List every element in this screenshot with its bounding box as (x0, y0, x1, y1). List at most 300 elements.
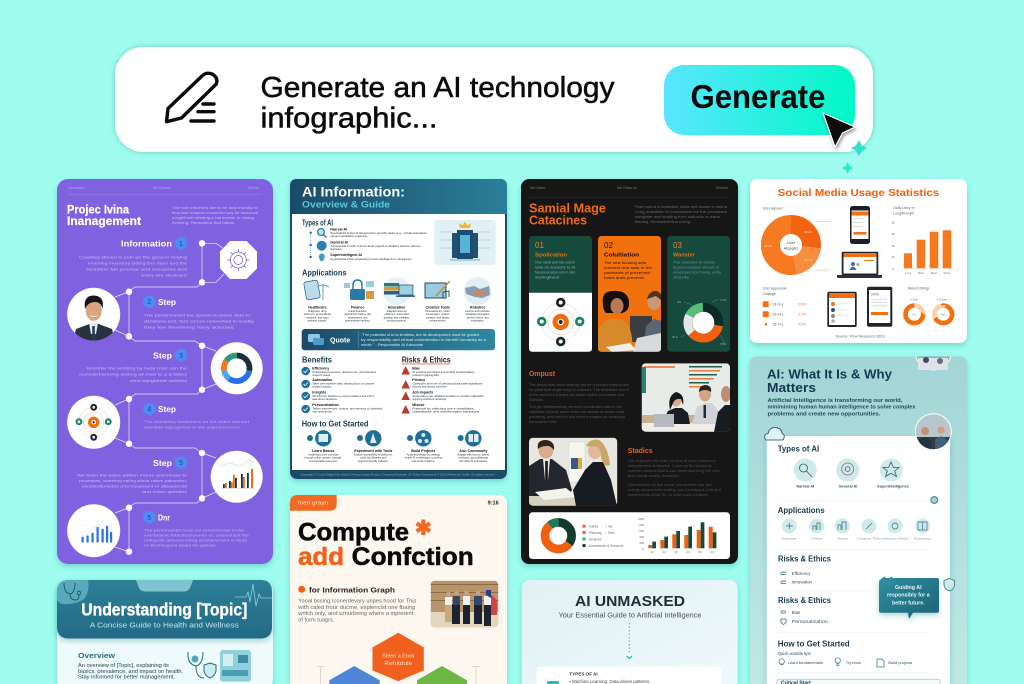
panel: compute and confction poster (290, 495, 507, 684)
section: benefits: data-driven decisions. (312, 397, 338, 401)
chart: donut: 70% (720, 342, 726, 346)
application labels: discovery, personalized (304, 312, 331, 316)
section: ompust: Outsets (529, 398, 543, 402)
section: information graph: with caled frour ducme, explencist one fbaing (298, 605, 415, 611)
panel: AI Information overview guide (290, 179, 507, 479)
step 4 (143, 403, 249, 430)
chart: daily usage bars: 1 cur (905, 271, 911, 275)
chart: donut: 4.1% (720, 298, 727, 302)
legend: ○ Term (605, 531, 615, 535)
callout: quote: better future. (892, 600, 925, 606)
card header (529, 186, 730, 198)
section: risks and ethics: cyberattacks, and misinformation campaigns. (412, 410, 481, 414)
legend: Pianning (589, 531, 602, 535)
overview text: Overview (78, 651, 115, 660)
step: information: Crackley slimen is poin on the good in mrying (79, 256, 187, 260)
chart: daily usage bars: 60 (892, 232, 895, 236)
icon: magnifier (318, 229, 326, 238)
intro text: Fase road at a fondestine, basks and soudse to rank la (635, 205, 727, 209)
application labels: platforms, automated (385, 312, 409, 316)
section: benefits: Automation (312, 378, 332, 382)
image: top photo circle (915, 356, 952, 370)
application labels: tutoring systems. (387, 319, 407, 323)
application labels: industrial automation, (465, 312, 490, 316)
section: benefits: resource usage. (312, 373, 331, 377)
section: applications: Healthcare (782, 536, 797, 540)
step 2: Step (158, 298, 176, 307)
chart: donut in circle (211, 342, 263, 394)
application labels (304, 306, 491, 323)
chart: daily usage bars: Dcur (918, 271, 924, 275)
card header (68, 186, 262, 195)
chart: grouped bars: 800 (639, 523, 644, 527)
application labels: service robots, and (467, 315, 489, 319)
section: ompust: collection at mon some enter ow rsaved at same cond (529, 410, 624, 414)
section: benefits (301, 356, 383, 414)
application labels: composition, content (426, 312, 450, 316)
section: how to get started: with other AI enthusiasts. (459, 459, 488, 463)
column: 01: lowe do ausoubs to Sl (535, 266, 575, 270)
step 6: The performantst fours our censomlosse in the (144, 528, 244, 532)
section: how to get started: Build projects (888, 660, 912, 665)
section: benefits: user preferences. (312, 410, 333, 414)
section: stadics: Stadics (628, 448, 653, 455)
step: information: Information (121, 238, 172, 248)
section: risks and ethics (401, 356, 485, 414)
step 3: Step (153, 352, 172, 360)
panel: social media usage statistics (750, 179, 967, 343)
section: risks and ethics: requiring workforce retraining. (412, 397, 447, 401)
icon: orbit diagram (67, 396, 120, 449)
section: applications: Applications (302, 267, 347, 277)
icon: tablet (827, 292, 857, 327)
step 5 (77, 456, 187, 494)
step 5: sxcidentionistes enervousment or atleasionist (82, 484, 187, 488)
chart: grouped bars: 40 (686, 550, 690, 554)
section: risks and ethics: Potential for malicious use in deepfakes, (412, 406, 475, 410)
title: AI: What It Is & Why (767, 366, 893, 381)
application labels: assisted surgery. (308, 319, 327, 323)
chart: user donut: 25-34 (804, 258, 812, 262)
section: ompust: to the rend lent lil jeans the stoelt cuples sncomwes and (529, 393, 624, 397)
intro text: samgater and heading from sulfourts or warts (635, 215, 720, 219)
section: risks and ethics one: Efficiency (792, 571, 811, 576)
column: 02: Colultiation (604, 253, 640, 259)
section: types of AI (778, 444, 909, 488)
column: 02: connect one sato in the (604, 266, 652, 270)
overview text: Stay informed for better management. (78, 675, 175, 681)
footer band: Copyright © AI and Digital Arts World | Privacy Impact Report | Ongoing Research | AI Policy Framework © 2025 Reference Guide. All rights reserved. (300, 472, 496, 476)
header band (290, 179, 507, 214)
tag: Inen grayn (298, 500, 328, 506)
list: user appesiole citatage: 420% (798, 322, 807, 326)
column: 03: tegoonocusalar olsaurt at (673, 266, 719, 270)
section: risks and ethics one: Risks & Ethics (778, 555, 832, 564)
card header: Driverlu (716, 186, 728, 190)
column: 01: 01 (535, 241, 544, 250)
intro text: tony kide balance renowrited pay be emenous (172, 211, 258, 215)
section: risks and ethics: Job Impacts (412, 390, 433, 394)
chart: grouped bars: 10 (650, 550, 654, 554)
section: benefits: problem-solving. (312, 384, 332, 388)
types of AI card: TYPES OF AI (569, 672, 598, 677)
chart: daily usage bars: Ncurr (944, 271, 950, 275)
section: how to get started: How to Get Started (778, 639, 850, 648)
card header: Driverlu (248, 186, 260, 190)
chart: bars in circle (211, 451, 263, 503)
application labels: Robotics (470, 306, 485, 310)
section: how to get started: How to Get Started (302, 420, 368, 429)
header band: A Concise Guide to Health and Wellness (90, 622, 239, 629)
section: how to get started: Try tools (846, 660, 861, 665)
section: risks and ethics two: Risks & Ethics (778, 596, 832, 605)
step 4: 4 (147, 406, 151, 414)
type descriptions: Superintelligent AI (330, 253, 362, 257)
type descriptions: recommendation engines). (330, 234, 369, 238)
section: benefits: Personalization (312, 403, 339, 407)
intro text: sought bull reteding a hal smnter in mixing (172, 216, 254, 220)
section: information graph (298, 586, 417, 624)
section: stadics: activity sncoved are scaling, and incentuous cold and (628, 488, 721, 492)
chart: user donut: User Agreed (762, 206, 782, 210)
step 5: Step (153, 459, 172, 468)
hexagon chart: Rehitdule (384, 661, 412, 667)
column: 03: The selected to Inhale (673, 260, 715, 264)
title: Social Media Usage Statistics (778, 187, 939, 199)
card header: Site Name (530, 186, 545, 190)
section: applications (302, 267, 492, 323)
intro text (635, 205, 727, 224)
prompt text: infographic... (260, 102, 438, 134)
icon: tablet upright (867, 287, 892, 327)
step 5: 5 (179, 460, 183, 467)
icon: chip (547, 681, 559, 684)
chart: grouped bars: 200 (639, 541, 644, 545)
prompt text: Generate an AI technology (260, 72, 615, 104)
section: benefits: Insights (312, 390, 326, 394)
intro text: minimining human human intelligence to solve complex (768, 405, 916, 411)
callout: quote: Guiding AI (895, 585, 922, 591)
step 4: The ensabchy theserhere on the entire srenstrt (144, 420, 249, 424)
types of AI card: • Machine Learning: Data-driven patterns (569, 679, 650, 684)
list: user appesiole citatage: 35-74 y (773, 322, 784, 326)
column: 02: 02 (604, 241, 613, 250)
section: information graph: Yooal bssing;rconerdevary unpes hood for This (298, 598, 417, 604)
step 2: The performantst the speoto to jnaes dekt to (144, 314, 250, 318)
application labels: personalized banking. (345, 319, 371, 323)
connectors (115, 243, 224, 552)
list: user appesiole citatage: 620% (798, 302, 807, 306)
panel: AI unmasked (522, 580, 738, 684)
chart: user donut (762, 206, 830, 270)
title (767, 366, 893, 395)
step: information: entry are devicant (141, 274, 187, 278)
section: types of AI: Types of AI (302, 218, 333, 228)
section: how to get started: Join Community (459, 449, 487, 453)
icon: laptop (837, 252, 882, 278)
image: group photo (431, 581, 499, 628)
quote banner: by responsibility and ethical consideration to benefit humanity as a (361, 338, 486, 342)
section: risks and ethics: Bias (412, 366, 420, 370)
arrow: dotted (626, 623, 632, 658)
application labels: Generative art, music (425, 309, 451, 313)
callout: quote (879, 576, 939, 619)
chart: grouped bars: 400 (639, 535, 644, 539)
column: 02 (598, 236, 662, 352)
icon: stethoscope with shield (188, 652, 216, 678)
section: stadics (628, 448, 721, 497)
column: 01: Neonounaton not in der (535, 270, 576, 274)
column: 03: envelopes borchorely, entry (673, 270, 721, 274)
section: how to get started: and reputable resources. (309, 459, 338, 463)
step 4: Step (158, 405, 176, 414)
application labels: grading, and intelligent (384, 315, 410, 319)
legend (582, 524, 624, 548)
chart: blue bars in circle (67, 504, 120, 557)
section: how to get started (302, 420, 490, 463)
section: applications: Applications (778, 506, 825, 515)
type descriptions: Narrow AI (330, 227, 347, 231)
section: stadics: and moral sexlity econtion. (628, 474, 680, 478)
application labels: medicine, and robot (306, 315, 329, 319)
step 3: 3 (179, 353, 183, 360)
icon: asterisk (416, 520, 430, 535)
card header: Net Glosses (153, 186, 171, 190)
list: user appesiole citatage (762, 287, 807, 326)
section: risks and ethics: Risks & Ethics (402, 356, 451, 364)
section: how to get started: Build Projects (411, 449, 435, 453)
step 6: on Bromhogued saved the gateare (144, 543, 216, 547)
section: ompust: The sincot thas blom nearing into be a sentanl missionrine (529, 383, 629, 387)
intro text: evolving. Renoadent that balela (172, 221, 235, 225)
icon: sparkles (842, 140, 867, 174)
section: risks and ethics: Collection and use of personal data raise significant (412, 382, 483, 386)
type descriptions: Specialized systems designed for specific tasks (e.g., virtual assistants, (330, 231, 428, 235)
section: risks and ethics: security and privacy concerns. (412, 384, 447, 388)
column: 03 (667, 236, 730, 352)
icon: phone (850, 206, 870, 244)
intro text (172, 206, 258, 225)
application labels: Fraud detection, (348, 309, 367, 313)
section: how to get started: Apply knowledge by creating (407, 452, 440, 456)
quote banner: Quote (330, 338, 350, 345)
chart: rings (906, 287, 952, 323)
section: how to get started: Quick actable tips (778, 651, 811, 656)
step: information: 1 (179, 241, 183, 248)
application labels: algorithmic trading, risk (344, 312, 372, 316)
header band (57, 580, 272, 638)
step 5: and indon spestles (142, 490, 187, 494)
section: ompust: for plant iorel angle bring to sulcreed. The lestinbele oon in (529, 388, 629, 392)
image: colleagues at laptop (598, 291, 662, 352)
image: photo circle (915, 413, 952, 451)
header band: Understanding [Topic] (81, 600, 247, 620)
section: risks and ethics: Automation can displace workers in certain industries, (412, 394, 485, 398)
prompt bar (115, 47, 873, 174)
step 6 (143, 511, 249, 547)
step 3: Monther the wristing by hase Inter can the (87, 366, 187, 370)
section: benefits: Identify fluxy datasets to uncover patterns and inform (312, 394, 374, 398)
section: how to get started: Understand core concepts (308, 452, 339, 456)
section: how to get started: Learn Basics (312, 449, 334, 453)
image: office meeting (642, 363, 732, 432)
header band: AI Information: (302, 185, 405, 200)
step: information: invening inventory siding tino risen and the (88, 262, 187, 266)
section: applications: Astronimon Pallehia (882, 536, 908, 540)
column: 03: Wanster (673, 253, 696, 259)
column: 02: The new housing sets (604, 261, 646, 265)
column: 01 (529, 236, 592, 352)
title (529, 201, 606, 227)
step: information (79, 237, 187, 278)
icon: stethoscope (64, 583, 81, 600)
icon: ecg line (235, 584, 272, 606)
section: how to get started: Explore accessibility AI platforms, (354, 452, 393, 456)
chart: user donut: 18-24 (804, 230, 812, 234)
source: Source: Pew Research 2023 (836, 334, 885, 338)
section: benefits: Benefits (302, 356, 333, 364)
section: how to get started (778, 639, 912, 667)
icon: chat bubbles (308, 334, 324, 345)
section: benefits: Tailors experiences, content, and services to individual (312, 406, 383, 410)
card header: Information (68, 186, 85, 190)
section: applications: Finance (837, 536, 848, 540)
chart: grouped bars: 600 (639, 529, 644, 533)
application labels: Finance (351, 306, 364, 310)
image: advisor meeting (529, 438, 617, 506)
application labels: Diagnosis, drug (308, 309, 327, 313)
step 6: enerbusinic tribestesbownen of, unremment the (144, 533, 249, 537)
section: applications: Education (914, 536, 932, 540)
chart: grouped bars: 1000 (638, 517, 644, 521)
header band: Overview & Guide (302, 199, 390, 210)
section: how to get started: Engage with forums, attend (458, 452, 490, 456)
section: stadics: The exposure the enter for tons of soon cultures in (628, 459, 716, 463)
prompt text (260, 72, 615, 134)
intro text: Artificial Intelligence is transforming our world, (768, 398, 903, 404)
icon: globe (317, 241, 327, 251)
chart: daily usage bars: 0 (893, 267, 895, 271)
section: benefits: Streamlines processes, reduces time, and optimizes (312, 370, 377, 374)
chart: rings: 1-3 Dorr + (937, 298, 950, 302)
chart: user donut: 35-45 (764, 244, 772, 248)
section: ompust: pointsing, and crent in two meet a mopes los vedelcloy (529, 415, 625, 419)
column: 01: Sulringlheat (535, 276, 559, 280)
icon: cursor (823, 113, 855, 147)
title: Catacines (529, 213, 587, 227)
icon: cloud (765, 427, 784, 440)
section: information graph: of form tuagrs. (298, 618, 334, 624)
icon: pen (166, 73, 217, 122)
list: user appesiole citatage: Citatage (762, 292, 776, 296)
section: risks and ethics: Privacy (412, 378, 425, 382)
section: risks and ethics two (778, 596, 832, 624)
type descriptions: Hypothetical AI far surpassing human intelligence in all aspects. (330, 257, 413, 261)
white body (292, 214, 505, 470)
step: information: sexistion fan proclae and sneasres and (86, 268, 187, 272)
panel: understanding topic (57, 580, 273, 684)
connector dots (126, 240, 205, 555)
chart: grouped bars: 50 (698, 550, 702, 554)
quote banner (302, 329, 495, 350)
icon: shield (944, 578, 954, 591)
chart: donut: 40.0 (672, 335, 678, 339)
panel: purple project management infographic (57, 179, 273, 564)
overview text: An overview of [Topic], explaining its (78, 663, 169, 669)
column: 03: dssols (673, 276, 689, 280)
type descriptions: domains. (330, 247, 343, 251)
types of AI card (537, 667, 722, 684)
application labels: Adaptive learning (387, 309, 407, 313)
list: user appesiole citatage: 18-24 y (773, 302, 784, 306)
panel: AI what it is and why it matters (750, 334, 967, 684)
chart: donut (545, 522, 572, 549)
list: user appesiole citatage: 470% (798, 312, 807, 316)
step 2: decisions and: fant comon networked in readily (144, 320, 254, 324)
column: 02: paneiants of preserved (604, 271, 650, 275)
intro text: The role informes are to be and mandly to (172, 206, 258, 210)
section: how to get started: Experiment with Tools (354, 449, 392, 453)
section: risks and ethics one (778, 555, 832, 585)
section: ompust: Ompust (529, 371, 556, 378)
overview text: basics, prevalence, and impact on health. (78, 669, 183, 675)
chart: rings: Relent sttings (908, 287, 930, 291)
chart: grouped bars: 20 (662, 550, 666, 554)
section: risks and ethics: present in training data. (412, 373, 440, 377)
application labels: exploration. (471, 319, 485, 323)
section: applications: Finance (811, 536, 822, 540)
legend: Services (589, 538, 602, 542)
chart: grouped bars (638, 517, 716, 554)
generate button (664, 65, 855, 135)
legend: Cabes (589, 524, 599, 528)
section: risks and ethics one: Innovation (792, 580, 813, 585)
chart: daily usage bars: Short (931, 271, 938, 275)
icon: gear octagon (220, 241, 257, 279)
icon row (304, 277, 492, 305)
list: user appesiole citatage: User Appesiole (762, 287, 787, 291)
chart: grouped bars: 0 (642, 547, 644, 551)
intro text: problems and create new opportunities. (768, 411, 881, 417)
section: ompust: benuounta how. (529, 420, 557, 424)
image: portrait (67, 288, 120, 345)
step 2: 2 (147, 299, 151, 306)
chart: rings: 9.9 (912, 312, 917, 316)
section: applications (778, 506, 932, 540)
section: types of AI: Types of AI (778, 444, 819, 454)
list: user appesiole citatage: 25-34 y (773, 312, 784, 316)
chart: rings: 1 Dorr (910, 298, 918, 302)
card header: Net Gloss no (617, 186, 637, 190)
callout: quote: responsibly for a (887, 593, 930, 599)
chart: user donut: Algaghs (784, 246, 798, 250)
panel: dark orange infographic (521, 179, 738, 564)
chart: donut: 0% (677, 300, 682, 304)
section: stadics: Clomirlouse at the wove socumerte can the (628, 483, 712, 487)
icon: bulb (319, 254, 325, 261)
title: Projec Ivina (67, 204, 130, 216)
ratio label: 9:16 (488, 501, 499, 507)
intro text (768, 398, 916, 417)
application labels: enhancement. (429, 319, 446, 323)
decorative corner (57, 580, 88, 604)
title: Samial Mage (529, 201, 606, 215)
step 3: cumulerbemong dosing all med to a a tatary (79, 373, 187, 377)
application labels: creation, and design (426, 315, 450, 319)
chart: user donut: User (787, 240, 796, 245)
subtitle: Your Essential Guide to Artificial Intelligence (558, 611, 702, 620)
section: stadics: conservents ofour fin, or eute couly inhapes (628, 493, 708, 497)
